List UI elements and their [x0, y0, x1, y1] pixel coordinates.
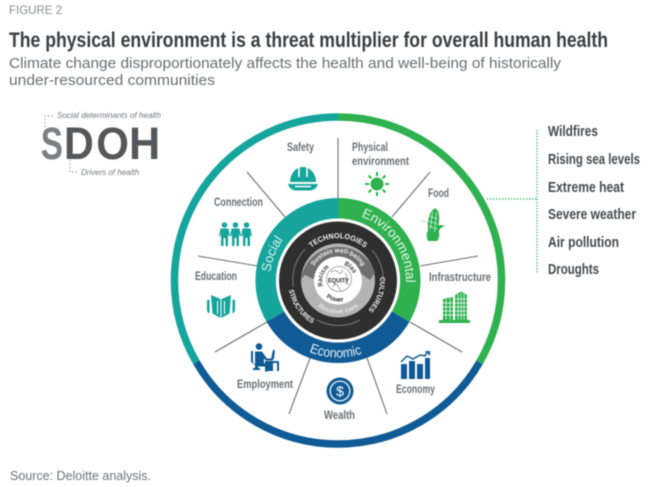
climate hazards list: Air pollution	[548, 234, 619, 251]
globe and equity: EQUITY	[328, 278, 350, 284]
SDOH key	[41, 111, 162, 177]
icon: sun	[365, 172, 389, 196]
icon: buildings	[439, 292, 470, 323]
label: Receive care: Receive care	[318, 303, 358, 314]
label: Racism: Racism	[317, 264, 330, 288]
core rings	[276, 218, 400, 340]
SDOH key: Social determinants of health	[57, 111, 162, 120]
icon: connection people	[219, 222, 252, 246]
segment labels: Wealth	[324, 410, 355, 422]
climate hazards list	[548, 123, 640, 278]
spokes	[198, 138, 478, 414]
climate hazards list: Severe weather	[548, 206, 636, 223]
climate hazards list: Extreme heat	[548, 179, 624, 196]
label: Bias: Bias	[344, 260, 356, 274]
label: Economic: Economic	[310, 343, 362, 358]
label: Power: Power	[326, 293, 344, 302]
SDOH key: O	[96, 118, 129, 169]
segment labels: Education	[195, 271, 237, 283]
subtitle	[9, 55, 562, 89]
SDOH key: Drivers of health	[81, 168, 140, 177]
figure label: FIGURE 2	[9, 3, 62, 17]
domain ring	[254, 197, 422, 364]
icon: safety helmet	[288, 166, 318, 190]
segment labels: Infrastructure	[429, 272, 491, 284]
label: Environmental: Environmental	[362, 208, 416, 282]
icon: economy bar chart	[401, 351, 430, 379]
SDOH key: H	[129, 118, 160, 169]
segment labels: Food	[428, 188, 449, 200]
icon: wealth coin	[326, 378, 354, 404]
connector: physical environment to hazards	[487, 130, 537, 274]
segment labels: Employment	[237, 379, 293, 391]
subtitle: Climate change disproportionately affects the health and well-being of historically	[9, 55, 562, 72]
segment labels: Connection	[214, 197, 263, 209]
climate hazards list: Droughts	[548, 261, 599, 278]
icon: corn	[420, 208, 445, 241]
SDOH key: S	[41, 118, 63, 169]
label: Social: Social	[261, 234, 284, 272]
subtitle: under-resourced communities	[9, 72, 215, 89]
icon: employment desk worker	[251, 343, 279, 372]
source note: Source: Deloitte analysis.	[10, 468, 151, 483]
segment labels: environment	[352, 156, 409, 168]
label: Technologies: TECHNOLOGIES	[308, 232, 368, 248]
segment labels: Safety	[287, 142, 314, 154]
outer ring	[174, 117, 502, 444]
segment labels	[195, 142, 491, 422]
climate hazards list: Rising sea levels	[548, 151, 640, 168]
SDOH key: D	[64, 118, 94, 169]
label: Structures: STRUCTURES	[288, 288, 315, 324]
segment labels: Economy	[396, 384, 435, 396]
icon: education book	[207, 295, 235, 318]
label: Cultures: CULTURES	[368, 276, 386, 313]
label: Sustain well-being: Sustain well-being	[310, 248, 366, 267]
segment labels: Physical	[352, 142, 388, 154]
icon: wealth coin: $	[336, 383, 344, 399]
climate hazards list: Wildfires	[548, 123, 598, 140]
